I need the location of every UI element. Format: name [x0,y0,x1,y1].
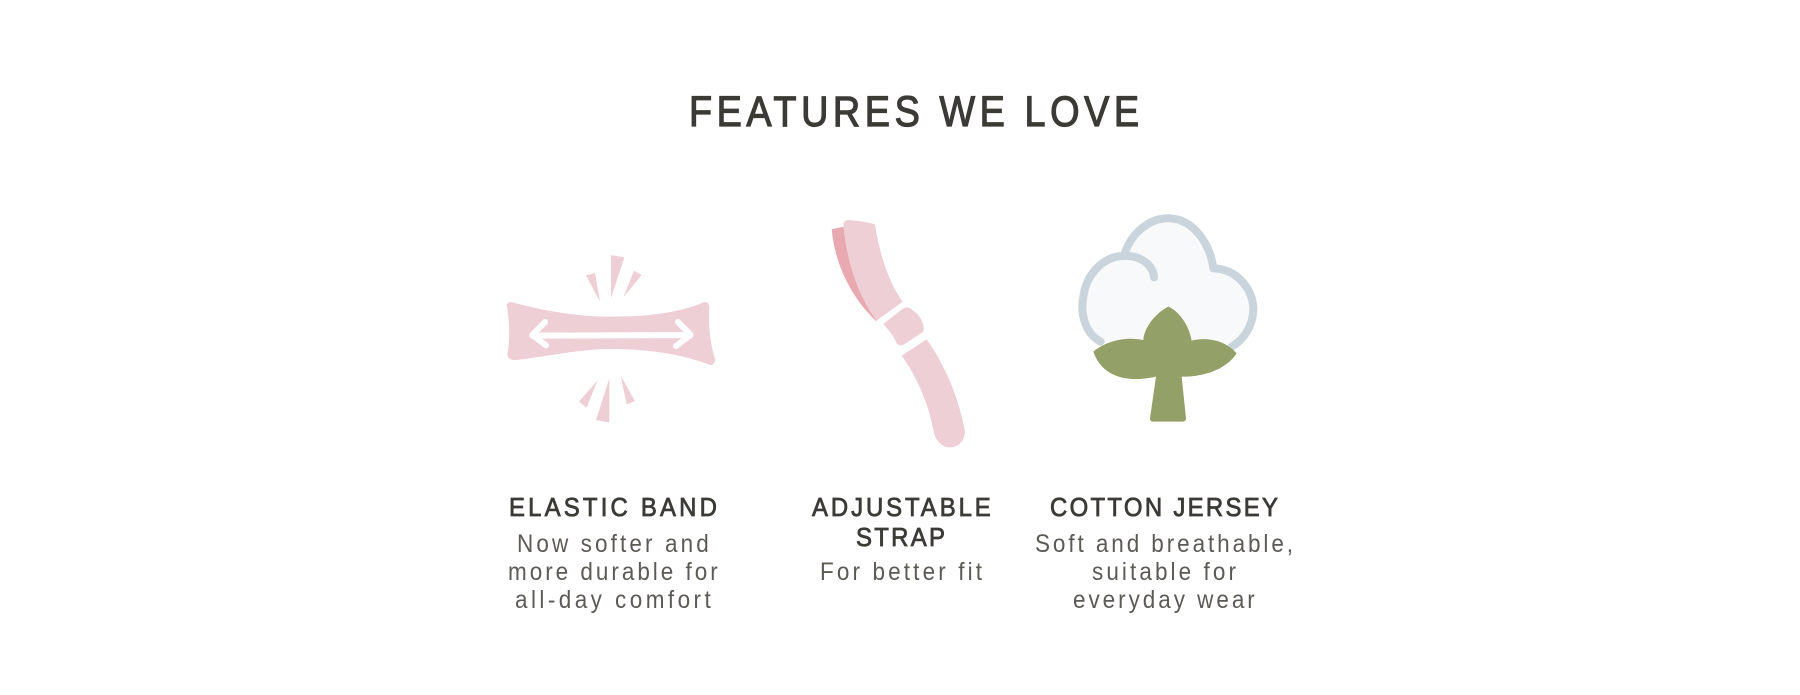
heading: cotton jersey: COTTON JERSEY [1050,493,1278,522]
icon: adjustable strap [832,220,965,447]
description: elastic band [508,530,718,614]
heading: adjustable strap: STRAP [856,523,945,552]
heading: adjustable strap: ADJUSTABLE [812,493,991,522]
panel: elastic band [507,255,718,614]
description: cotton jersey: suitable for [1092,558,1236,586]
panel: adjustable strap [812,220,991,586]
description: cotton jersey: everyday wear [1073,586,1255,614]
icon: elastic band [507,255,715,423]
description: elastic band: more durable for [508,558,718,586]
description: cotton jersey: Soft and breathable, [1035,530,1293,558]
icon: cotton boll [1082,218,1253,422]
description: elastic band: Now softer and [517,530,709,558]
description: adjustable strap: For better fit [820,558,982,586]
heading: adjustable strap [812,493,991,552]
heading: elastic band: ELASTIC BAND [509,493,717,522]
description: cotton jersey [1035,530,1293,614]
title: FEATURES WE LOVE [689,87,1139,136]
description: elastic band: all-day comfort [515,586,711,614]
panel: cotton jersey [1035,218,1293,614]
